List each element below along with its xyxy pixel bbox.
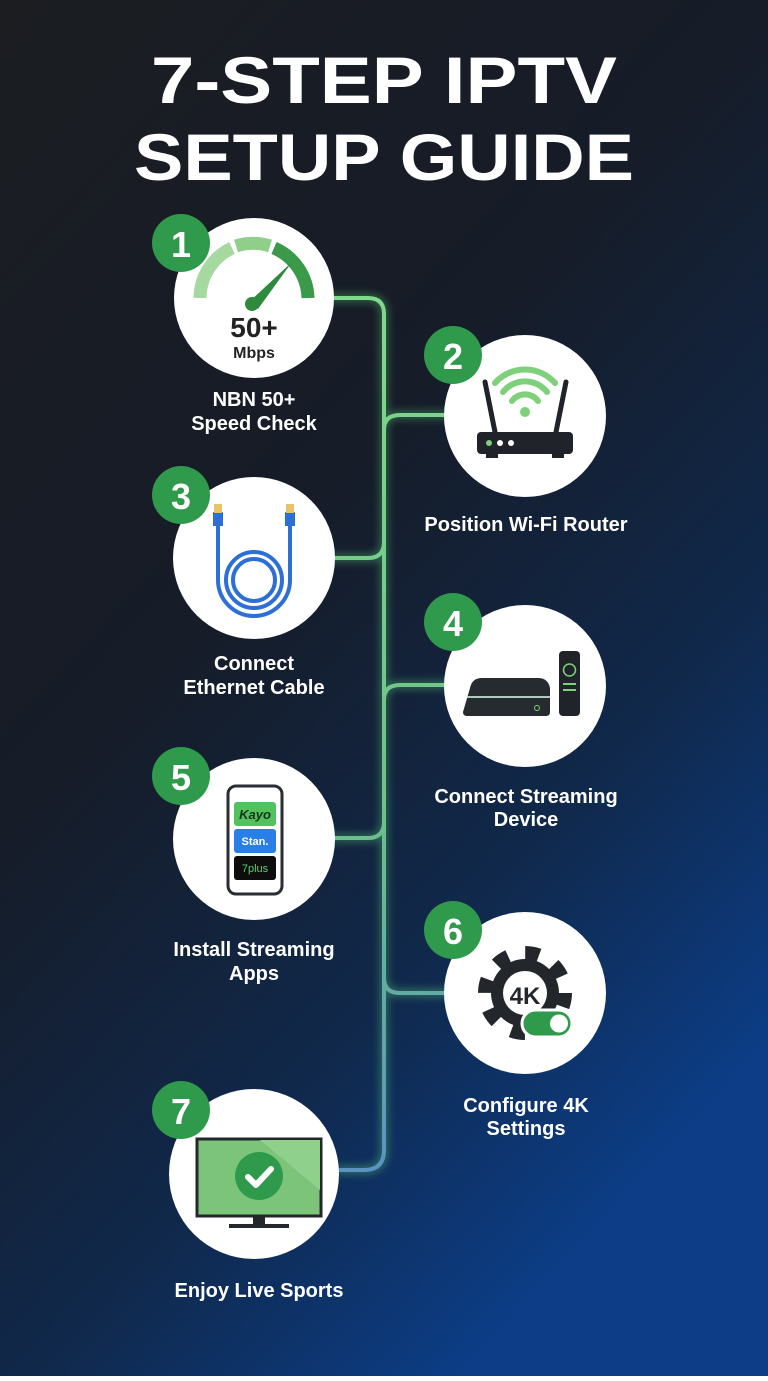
badge 6 <box>424 901 482 959</box>
label 1 <box>191 389 318 435</box>
label 6 <box>463 1095 589 1140</box>
step 2 <box>444 335 606 497</box>
icon: speedometer <box>200 243 308 311</box>
badge 2: 2 <box>443 336 463 377</box>
label 3: Ethernet Cable <box>183 677 325 699</box>
badge 7: 7 <box>171 1091 191 1132</box>
icon: gear 4K toggle: 4K <box>510 983 541 1010</box>
badge 4: 4 <box>443 603 463 644</box>
step 7 <box>169 1089 339 1259</box>
label 3: Connect <box>214 653 294 675</box>
badge 1: 1 <box>171 224 191 265</box>
icon: streaming box and remote <box>463 651 580 716</box>
icon: phone with apps: Stan. <box>242 836 268 848</box>
badge 6: 6 <box>443 911 463 952</box>
label 5: Install Streaming <box>173 939 335 961</box>
badge 7 <box>152 1081 210 1139</box>
badge 2 <box>424 326 482 384</box>
badge 3 <box>152 466 210 524</box>
label 1: NBN 50+ <box>213 389 295 411</box>
badge 4 <box>424 593 482 651</box>
step 1: Mbps <box>233 345 275 362</box>
label 3 <box>183 653 325 699</box>
label 2: Position Wi-Fi Router <box>424 514 628 536</box>
step 1 <box>174 218 334 378</box>
icon: phone with apps <box>228 786 282 894</box>
title <box>134 43 634 194</box>
step 5 <box>173 758 335 920</box>
icon: gear 4K toggle <box>485 953 572 1037</box>
label 4: Connect Streaming <box>434 786 618 808</box>
label 6: Configure 4K <box>463 1095 589 1117</box>
icon: ethernet cable <box>213 504 295 616</box>
icon: router <box>477 369 573 458</box>
label 4 <box>434 786 618 831</box>
label 7: Enjoy Live Sports <box>175 1280 343 1302</box>
badge 1 <box>152 214 210 272</box>
title: 7-STEP IPTV <box>151 43 617 117</box>
label 1: Speed Check <box>191 413 318 435</box>
label 4: Device <box>494 809 558 831</box>
badge 5 <box>152 747 210 805</box>
title: SETUP GUIDE <box>134 120 634 194</box>
step 3 <box>173 477 335 639</box>
icon: phone with apps: 7plus <box>242 863 269 875</box>
connector lines <box>330 298 450 1170</box>
badge 3: 3 <box>171 476 191 517</box>
step 6 <box>444 912 606 1074</box>
badge 5: 5 <box>171 757 191 798</box>
label 6: Settings <box>487 1118 565 1140</box>
icon: TV with check <box>197 1139 321 1228</box>
step 1: 50+ <box>230 312 278 343</box>
label 5: Apps <box>229 963 279 985</box>
label 5 <box>173 939 335 985</box>
icon: phone with apps: Kayo <box>239 807 271 822</box>
step 4 <box>444 605 606 767</box>
